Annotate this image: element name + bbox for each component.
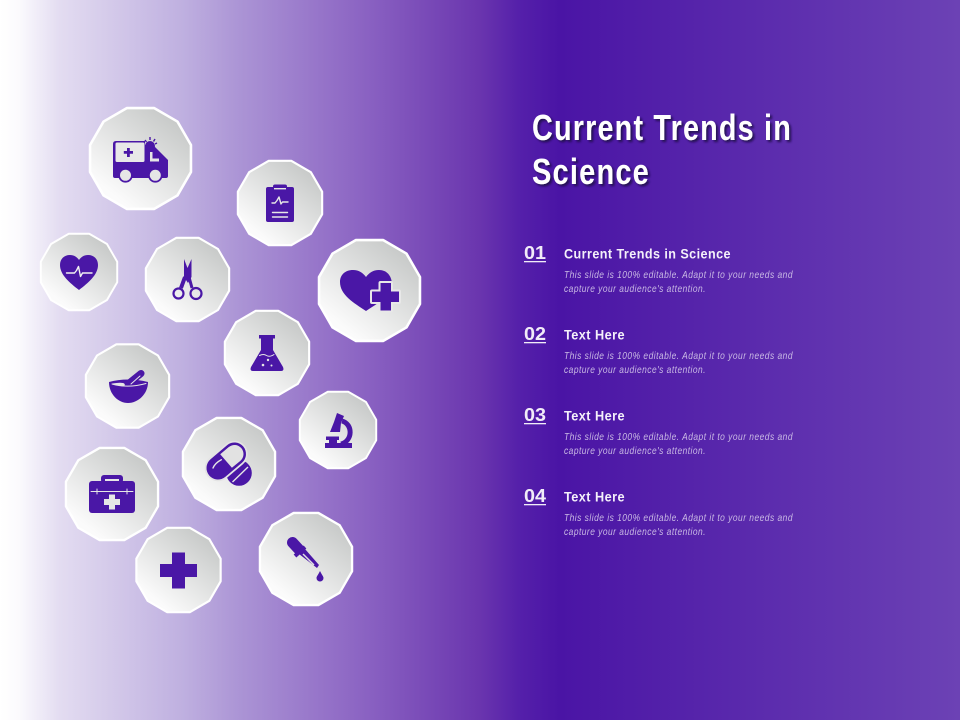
list item 01: Current Trends in Science [564,246,731,262]
list item 01: This slide is 100% editable. Adapt it to your needs and [564,269,793,281]
list item 02 [524,324,793,376]
title [532,107,792,192]
badge: scissors [146,238,229,321]
list item 02: This slide is 100% editable. Adapt it to your needs and [564,350,793,362]
list item 04: Text Here [564,488,625,504]
list item 03: This slide is 100% editable. Adapt it to your needs and [564,431,793,443]
list item 03: Text Here [564,408,625,424]
badge: medical cross [136,528,221,612]
badge: flask [225,311,309,395]
list item 03 [524,405,793,457]
badge: dropper [260,513,352,605]
badge: ambulance [90,108,191,209]
badge: pills [183,418,275,510]
icon cluster [41,108,420,612]
badge: mortar and pestle [86,344,169,428]
list item 03: capture your audience's attention. [564,445,706,457]
badge: first aid kit [66,448,158,540]
list item 04: capture your audience's attention. [564,526,706,538]
badge: clipboard [238,161,322,245]
list item 02: 02 [524,324,546,344]
list item 01: 01 [524,243,546,263]
badge: heart with plus [319,240,420,341]
list item 02: Text Here [564,326,625,342]
title: Current Trends in [532,107,792,148]
list item 01: capture your audience's attention. [564,283,706,295]
list item 02: capture your audience's attention. [564,364,706,376]
list item 03: 03 [524,405,546,425]
list item 04: This slide is 100% editable. Adapt it to your needs and [564,512,793,524]
list item 01 [524,243,793,295]
badge: heart with pulse [41,234,117,310]
title: Science [532,151,650,192]
badge: microscope [300,392,376,468]
list item 04: 04 [524,486,546,506]
list item 04 [524,486,793,538]
